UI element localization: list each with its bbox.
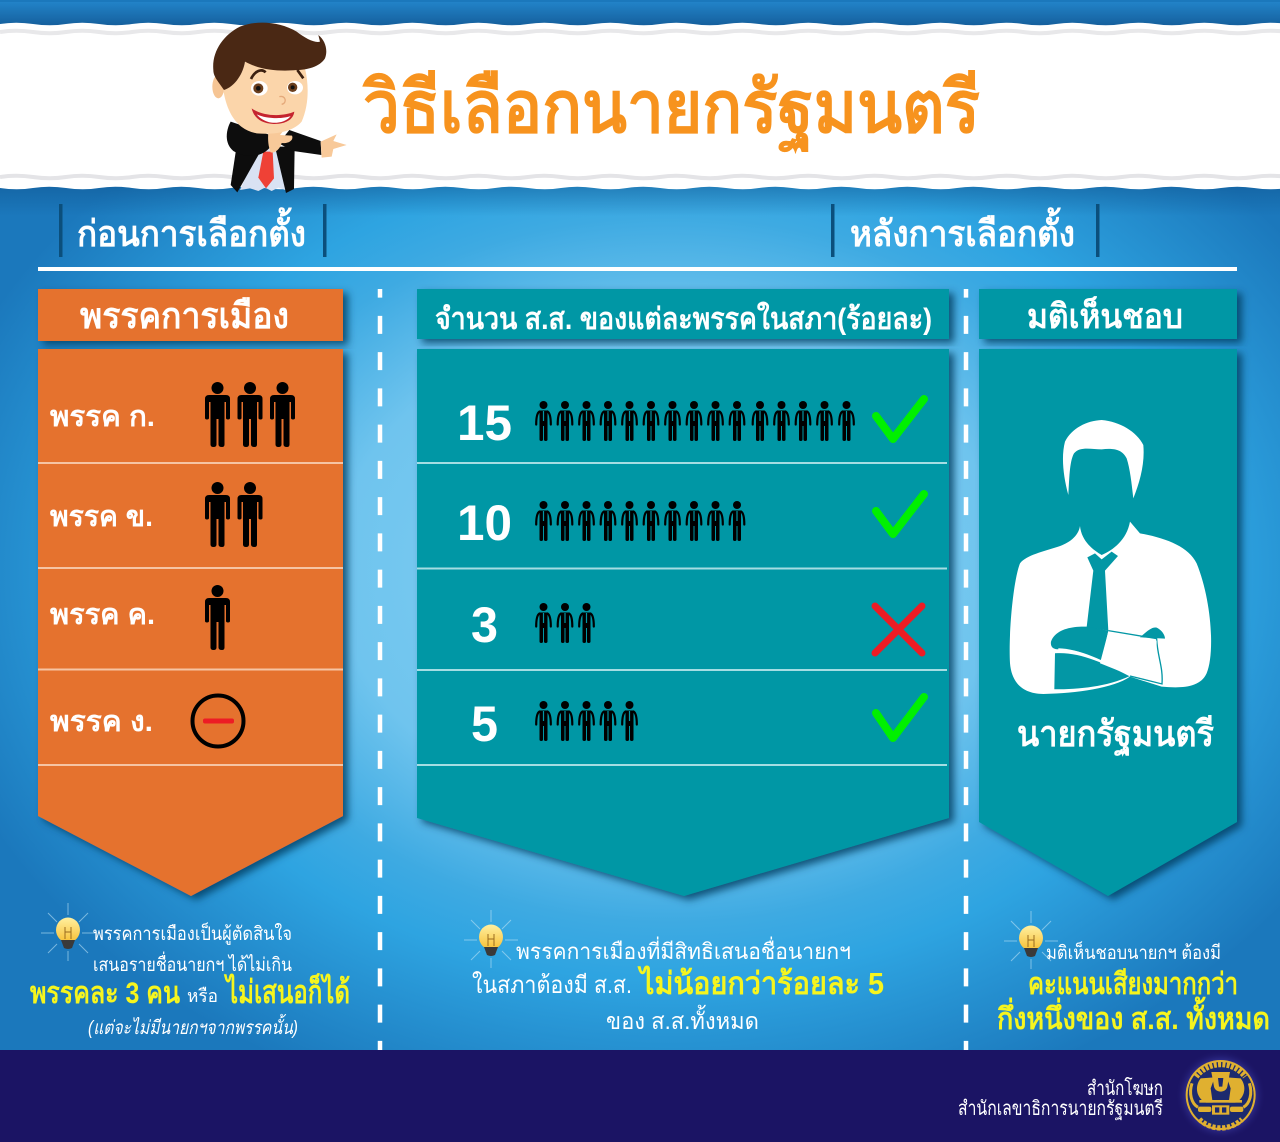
party B row: พรรค ข.	[50, 501, 153, 533]
row: 10 seats	[457, 494, 924, 551]
note: parties: หรือ	[187, 986, 218, 1006]
note: MP threshold: ของ ส.ส.ทั้งหมด	[606, 1005, 759, 1034]
icon: light bulb	[1004, 911, 1058, 969]
row: 15 seats	[457, 395, 924, 451]
panel body: confirmation	[979, 349, 1237, 896]
panel: confirmation	[979, 289, 1237, 896]
cartoon man	[212, 23, 347, 193]
panel body: MP counts	[417, 349, 949, 896]
caption: prime minister: นายกรัฐมนตรี	[1017, 713, 1215, 757]
note: MP threshold: พรรคการเมืองที่มีสิทธิเสนอชื่อนายกฯ	[516, 936, 851, 964]
panel header: MP counts	[417, 289, 949, 339]
panel body: parties	[38, 349, 343, 896]
icon: government seal	[1176, 1050, 1266, 1140]
party A row: พรรค ก.	[50, 401, 155, 433]
panel: MP counts	[417, 289, 949, 896]
footer credit: สำนักเลขาธิการนายกรัฐมนตรี	[958, 1098, 1163, 1120]
note: MP threshold: ไม่น้อยกว่าร้อยละ 5	[637, 965, 884, 1001]
row: 5 seats: 5	[471, 696, 498, 752]
note: parties	[30, 903, 350, 1039]
note: majority vote: มติเห็นชอบนายกฯ ต้องมี	[1046, 940, 1221, 964]
footer credit	[958, 1077, 1163, 1120]
icon: light bulb	[41, 903, 95, 961]
note: parties: พรรคละ 3 คน	[30, 977, 180, 1010]
header banner	[0, 23, 1280, 189]
note: parties: (แต่จะไม่มีนายกฯจากพรรคนั้น)	[88, 1013, 298, 1039]
party D row	[50, 696, 244, 746]
party D row: พรรค ง.	[50, 706, 153, 738]
party A row	[50, 382, 295, 447]
party C row: พรรค ค.	[50, 599, 155, 631]
note: MP threshold: ในสภาต้องมี ส.ส.	[472, 971, 632, 999]
panel header: parties	[38, 289, 343, 341]
party B row	[50, 482, 262, 547]
panel header: MP counts: จำนวน ส.ส. ของแต่ละพรรคในสภา(ร้อยละ)	[435, 301, 932, 336]
row: 15 seats: 15	[457, 395, 512, 451]
footer	[0, 1050, 1280, 1142]
title: วิธีเลือกนายกรัฐมนตรี	[362, 68, 980, 154]
panel header: confirmation	[979, 289, 1237, 339]
row: 3 seats	[471, 597, 922, 653]
panel: political parties	[38, 289, 343, 896]
row: 10 seats: 10	[457, 495, 512, 551]
panel header: parties: พรรคการเมือง	[80, 295, 289, 336]
section heading: before election: ก่อนการเลือกตั้ง	[77, 207, 306, 254]
top strip	[0, 2, 1280, 26]
icon: light bulb	[464, 910, 518, 968]
note: majority vote	[997, 911, 1270, 1036]
party C row	[50, 585, 230, 650]
row: 5 seats	[471, 696, 924, 752]
section heading: after election: หลังการเลือกตั้ง	[850, 207, 1075, 254]
panel header: confirmation: มติเห็นชอบ	[1027, 295, 1183, 336]
icon: prime minister silhouette	[1010, 420, 1211, 694]
note: parties: พรรคการเมืองเป็นผู้ตัดสินใจ	[93, 921, 292, 945]
note: parties: ไม่เสนอก็ได้	[224, 972, 350, 1010]
row: 3 seats: 3	[471, 597, 498, 653]
footer credit: สำนักโฆษก	[1087, 1077, 1163, 1100]
note: parties: เสนอรายชื่อนายกฯ ได้ไม่เกิน	[93, 951, 292, 976]
note: MP threshold	[464, 910, 884, 1034]
